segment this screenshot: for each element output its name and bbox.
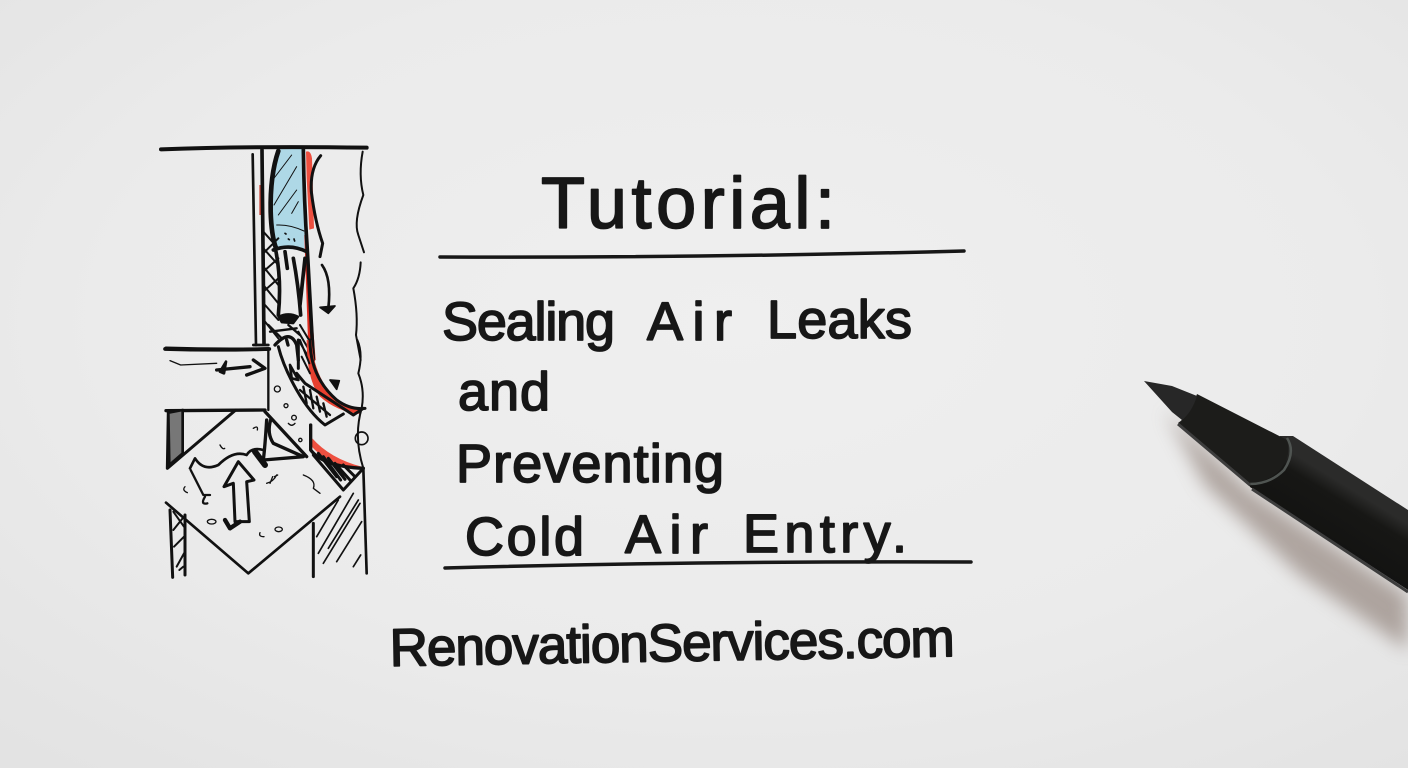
pen lower highlights (1178, 424, 1408, 592)
line: Cold Air Entry.: Cold (465, 507, 584, 567)
pen shadow (1165, 410, 1408, 650)
pen grip section (1178, 394, 1288, 484)
pen collar ring (1250, 438, 1291, 484)
subtitle text block (442, 290, 912, 567)
line: Cold Air Entry. (465, 504, 907, 567)
pen barrel (1245, 436, 1408, 590)
line: Cold Air Entry.: Entry. (743, 504, 907, 564)
upper wall section with glazing (161, 147, 367, 360)
line: Sealing Air Leaks: Sealing (442, 292, 615, 352)
marker pen (1144, 381, 1408, 650)
pen nib (1144, 381, 1197, 420)
sketch: cross-section of wall with air leak (161, 147, 368, 577)
line: Sealing Air Leaks (442, 290, 912, 352)
website address: RenovationServices.com (389, 609, 955, 678)
title: Tutorial: (541, 164, 835, 244)
title underline (440, 251, 964, 257)
line: Sealing Air Leaks: Air (647, 292, 732, 352)
line: Sealing Air Leaks: Leaks (767, 290, 912, 350)
line: and: and (458, 362, 550, 422)
subtitle underline (445, 562, 971, 568)
line: Preventing: Preventing (456, 434, 724, 494)
line: Cold Air Entry.: Air (625, 505, 708, 565)
lower wall section with cold air arrows (165, 340, 368, 577)
